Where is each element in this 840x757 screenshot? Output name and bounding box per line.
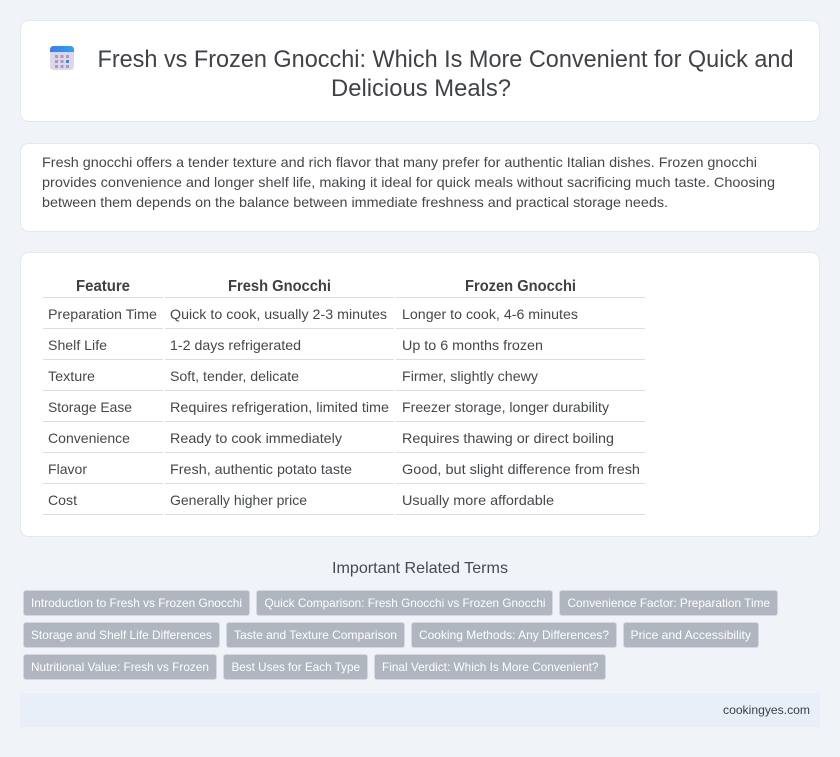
tag: taste and texture: Taste and Texture Comparison [234,628,397,642]
row: texture: Firmer, slightly chewy [402,368,538,384]
text block: introduction: provides convenience and longer shelf life, making it ideal for quick meals without sacrificing much taste. Choosing [42,174,775,190]
row: preparation time [43,306,645,329]
title: Delicious Meals? [331,75,511,102]
row: convenience [43,430,645,453]
tag: nutritional value [24,654,216,680]
row: shelf life: 1-2 days refrigerated [170,337,301,353]
panel: header [20,20,820,122]
row: preparation time: Quick to cook, usually 2-3 minutes [170,306,387,322]
tag: introduction [24,590,250,616]
tag: taste and texture [226,622,404,648]
row: texture [43,368,645,391]
tag: final verdict [374,654,606,680]
tag: cooking methods [412,622,616,648]
row: convenience: Ready to cook immediately [170,430,342,446]
text block: introduction [42,154,775,210]
row: convenience: Requires thawing or direct boiling [402,430,614,446]
tag: best uses [224,654,368,680]
table header: Feature [76,278,130,295]
tag: convenience factor: Convenience Factor: Preparation Time [568,596,770,610]
tag: nutritional value: Nutritional Value: Fresh vs Frozen [31,660,209,674]
row: cost: Generally higher price [170,492,307,508]
table header [43,278,645,298]
row: storage ease: Storage Ease [48,399,132,415]
heading: important related terms: Important Related Terms [332,560,508,577]
row: shelf life [43,337,645,360]
row: texture: Texture [48,368,95,384]
tag: quick comparison [256,590,552,616]
table header: Fresh Gnocchi [228,278,331,295]
text block: introduction: Fresh gnocchi offers a tender texture and rich flavor that many prefer for authentic Italian dishes. Frozen gnocchi [42,154,757,170]
row: flavor: Fresh, authentic potato taste [170,461,352,477]
row: shelf life: Shelf Life [48,337,107,353]
tag: price and accessibility [624,622,758,648]
tag: convenience factor [560,590,778,616]
row: flavor [43,461,645,484]
related terms tags [24,590,778,680]
tag: cooking methods: Cooking Methods: Any Differences? [419,628,609,642]
row: cost: Usually more affordable [402,492,554,508]
row: storage ease: Requires refrigeration, limited time [170,399,389,415]
text block: introduction: between them depends on the balance between immediate freshness and practical storage needs. [42,194,668,210]
row: flavor: Flavor [48,461,87,477]
row: cost: Cost [48,492,77,508]
tag: price and accessibility: Price and Accessibility [630,628,751,642]
row: storage ease: Freezer storage, longer durability [402,399,609,415]
row: texture: Soft, tender, delicate [170,368,299,384]
row: convenience: Convenience [48,430,130,446]
footer: cookingyes.com [723,703,810,717]
row: cost [43,492,645,515]
title [98,46,794,102]
icon: calendar [50,46,74,70]
tag: best uses: Best Uses for Each Type [232,660,360,674]
tag: final verdict: Final Verdict: Which Is More Convenient? [382,660,599,674]
row: preparation time: Preparation Time [48,306,157,322]
tag: storage and shelf life [24,622,220,648]
row: shelf life: Up to 6 months frozen [402,337,543,353]
row: preparation time: Longer to cook, 4-6 minutes [402,306,578,322]
tag: quick comparison: Quick Comparison: Fresh Gnocchi vs Frozen Gnocchi [264,596,546,610]
panel: introduction [20,144,820,232]
row: flavor: Good, but slight difference from fresh [402,461,640,477]
table header: Frozen Gnocchi [465,278,576,295]
tag: introduction: Introduction to Fresh vs Frozen Gnocchi [31,596,242,610]
tag: storage and shelf life: Storage and Shelf Life Differences [31,628,212,642]
title: Fresh vs Frozen Gnocchi: Which Is More Convenient for Quick and [98,46,794,73]
row: storage ease [43,399,645,422]
panel: comparison table [20,252,820,536]
footer [20,693,820,727]
